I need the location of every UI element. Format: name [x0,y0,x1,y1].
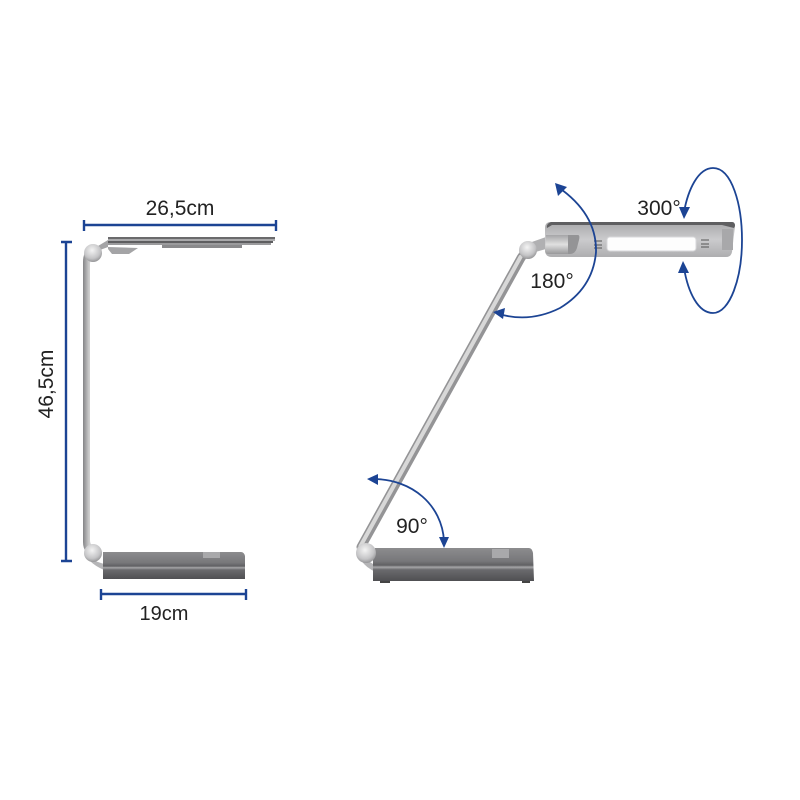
base [90,552,245,579]
arrow: 300 degree rotation [637,168,742,313]
arrow: 90 degree rotation [367,474,449,548]
lamp head [529,222,735,257]
bottom joint ball [84,544,102,562]
arm [360,251,528,547]
arrow: 300 degree rotation: 300° [637,197,681,220]
base [361,548,534,583]
dimension: width 26,5cm [84,197,276,231]
arm [83,247,97,558]
dimension: height 46,5cm: 46,5cm [35,350,58,418]
right lamp: angled view [356,222,735,583]
light window [607,237,696,251]
dimension: base 19cm [101,589,246,625]
dimension: width 26,5cm: 26,5cm [146,197,214,220]
top joint ball [84,244,102,262]
dimension: base 19cm: 19cm [140,603,188,625]
left lamp: side view [83,237,275,579]
arrow: 180 degree rotation: 180° [530,270,574,293]
vents [594,240,709,248]
dimension: height 46,5cm [35,242,72,561]
lamp head profile [98,237,275,254]
bottom joint ball [356,543,376,563]
arrow: 180 degree rotation [493,183,596,319]
arrow: 90 degree rotation: 90° [396,515,428,538]
hinge block [545,235,579,254]
top joint ball [519,241,537,259]
